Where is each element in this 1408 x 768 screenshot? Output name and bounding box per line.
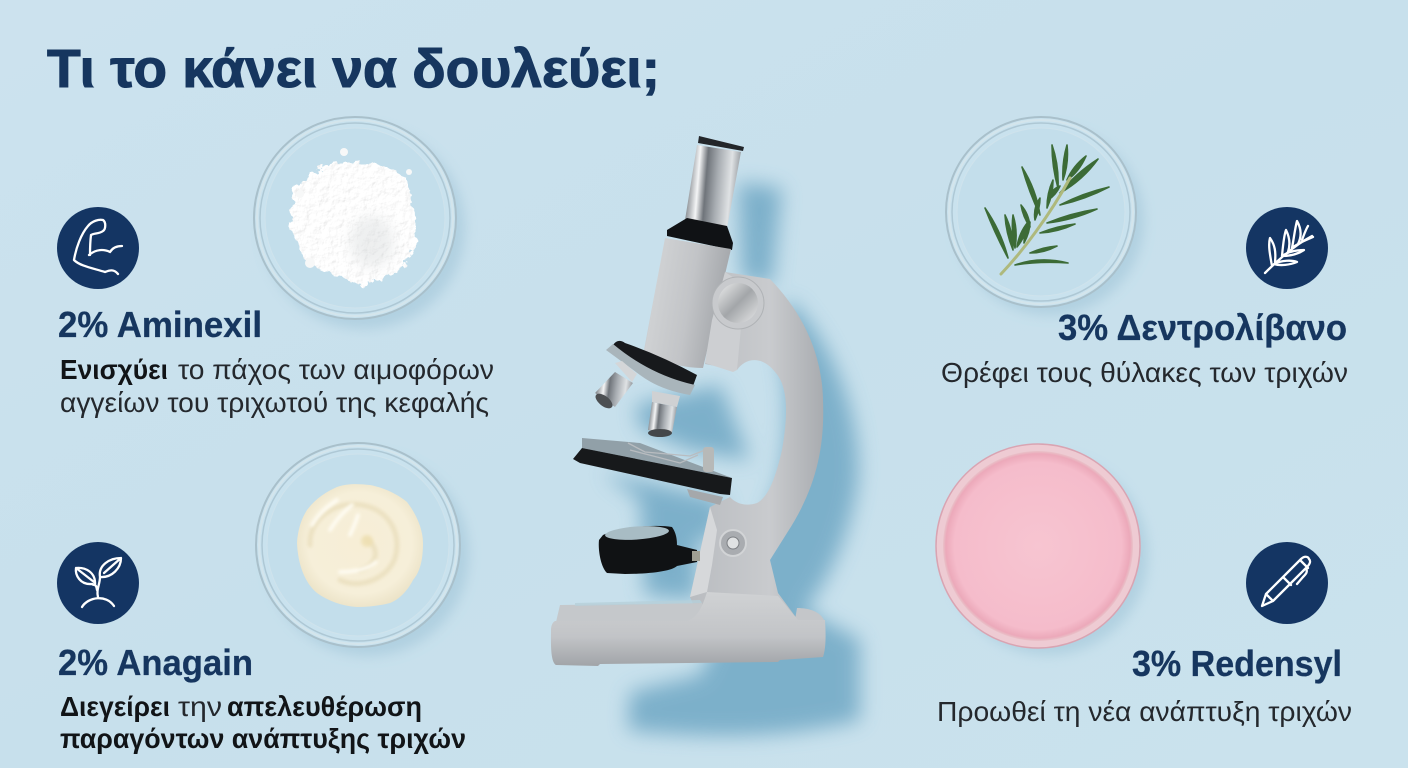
microscope shadow (602, 182, 860, 736)
petri dish: rosemary (946, 117, 1144, 315)
panel: 3% Δεντρολίβανο (941, 117, 1348, 388)
text: Anagain description: παραγόντων ανάπτυξης τριχών (60, 723, 466, 754)
text: Anagain description: απελευθέρωση (227, 691, 422, 722)
base (551, 507, 826, 666)
text: Aminexil description: το πάχος των αιμοφόρων (178, 354, 494, 385)
text: Aminexil description: Ενισχύει (60, 354, 168, 385)
objective lens left (593, 361, 637, 411)
heading: 3% Redensyl: 3% Redensyl (1132, 643, 1342, 684)
microscope (551, 136, 860, 736)
panel: 2% Aminexil (57, 117, 494, 418)
nosepiece (613, 341, 697, 386)
heading: 2% Aminexil: 2% Aminexil (58, 304, 262, 345)
icon: pen (1246, 542, 1328, 624)
petri dish: cream (256, 443, 469, 656)
text: Anagain description (60, 691, 466, 754)
icon: rosemary sprig (1246, 207, 1328, 289)
icon: flexed arm (57, 207, 139, 289)
main tube (644, 238, 731, 368)
heading: 2% Anagain: 2% Anagain (58, 642, 253, 683)
text: Anagain description: την (178, 691, 222, 722)
focus knob (712, 277, 764, 329)
text: rosemary description: Θρέφει τους θύλακες των τριχών (941, 357, 1348, 388)
title: Τι το κάνει να δουλεύει; (47, 39, 660, 99)
text: Anagain description: Διεγείρει (60, 691, 170, 722)
objective lens right (648, 391, 680, 437)
arm block (705, 272, 745, 372)
mirror (599, 524, 700, 574)
petri dish: white powder (254, 117, 465, 329)
arm (690, 272, 823, 620)
eyepiece (685, 136, 744, 228)
petri dish: pink serum (936, 444, 1148, 655)
collar (667, 218, 733, 250)
icon: seedling (57, 542, 139, 624)
stage (573, 438, 732, 505)
text: Aminexil description: αγγείων του τριχωτού της κεφαλής (60, 387, 489, 418)
text: Aminexil description (60, 354, 494, 418)
text: Redensyl description: Προωθεί τη νέα ανάπτυξη τριχών (937, 696, 1352, 727)
heading: 3% Δεντρολίβανο: 3% Δεντρολίβανο (1058, 307, 1347, 348)
rosemary sprig (985, 145, 1109, 274)
panel: 3% Redensyl (936, 444, 1352, 727)
panel: 2% Anagain (57, 443, 469, 754)
